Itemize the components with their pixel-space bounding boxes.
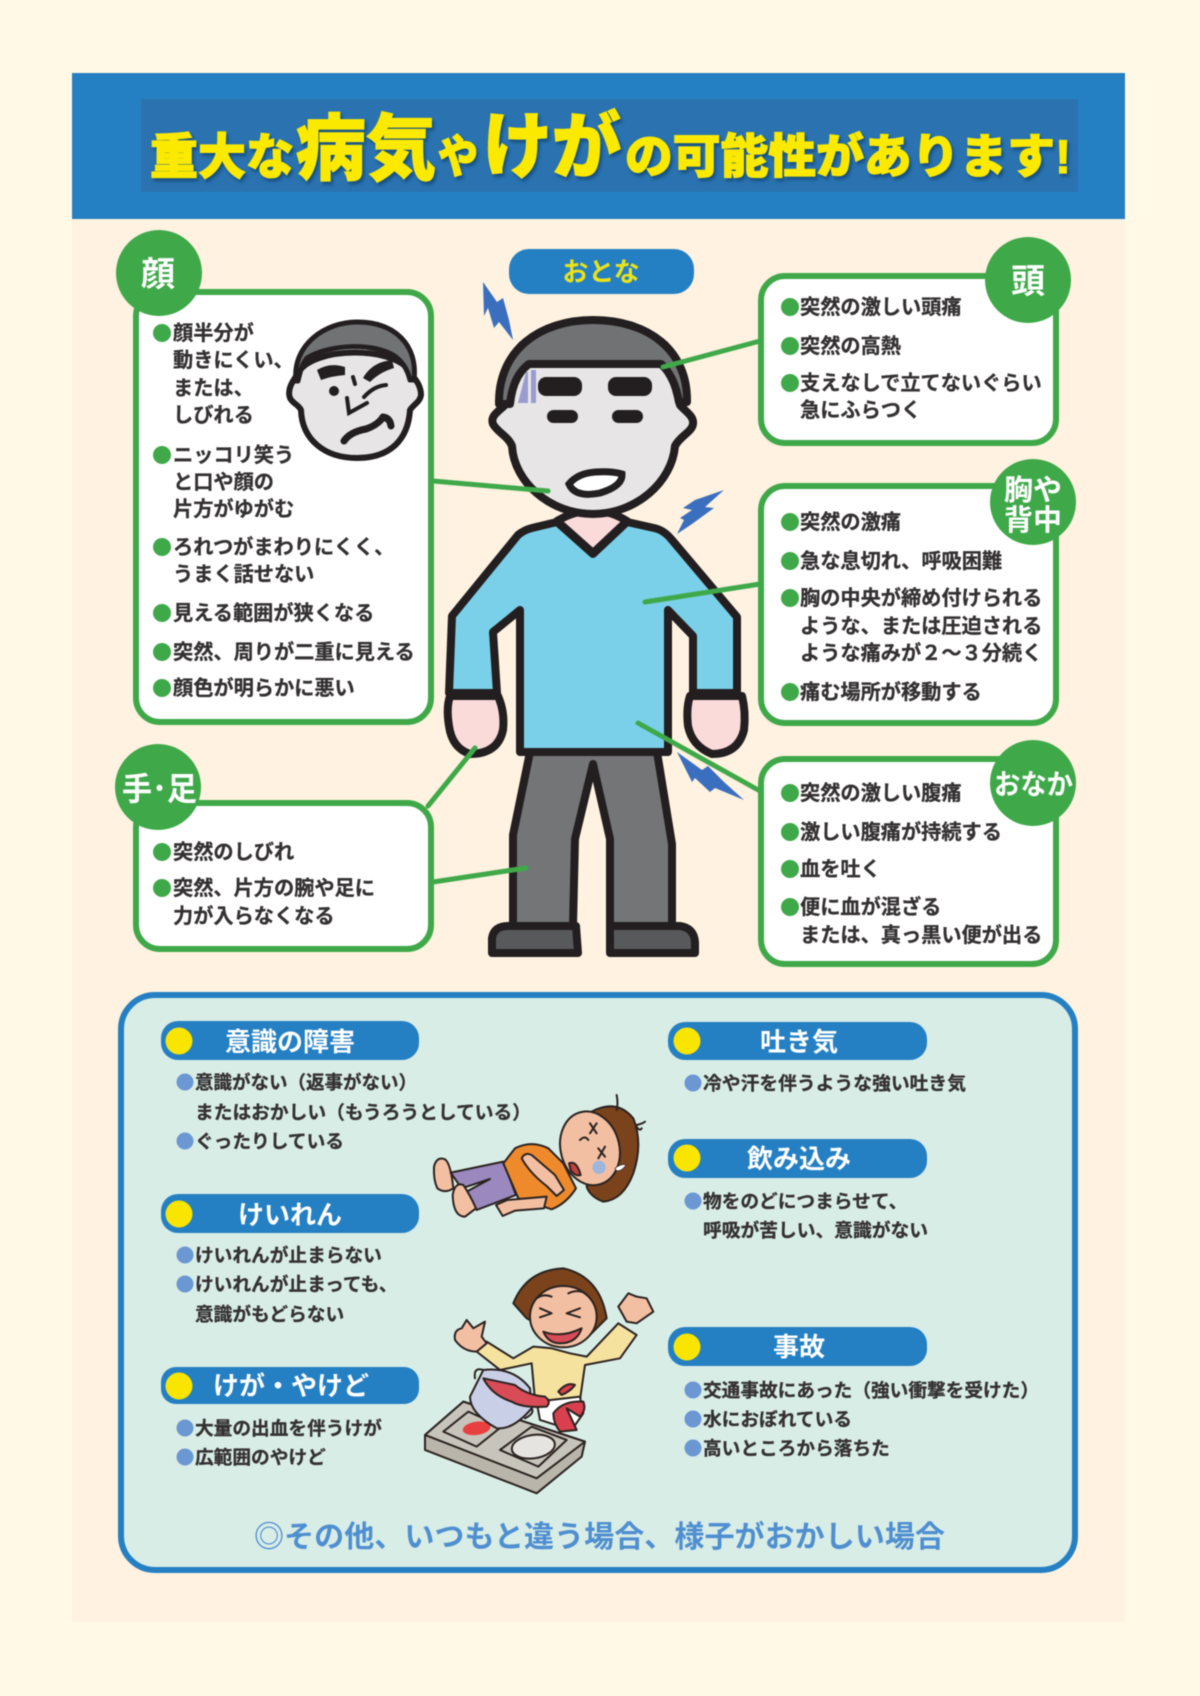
- connector: leg: [433, 868, 526, 882]
- section: consciousness: [161, 1021, 531, 1152]
- section: accidents: 交通事故にあった（強い衝撃を受けた）: [703, 1380, 1039, 1401]
- head: [492, 345, 693, 514]
- list: face symptoms: 片方がゆがむ: [173, 497, 294, 521]
- list: stomach symptoms: または、真っ黒い便が出る: [800, 923, 1042, 947]
- section: consciousness: 意識がない（返事がない）: [195, 1072, 417, 1093]
- list: face symptoms: しびれる: [173, 404, 254, 427]
- list: head symptoms: 急にふらつく: [800, 399, 921, 422]
- list: face symptoms: 顔半分が: [173, 321, 254, 345]
- illustration: collapsed girl: [434, 1095, 645, 1217]
- title text: 病気: [296, 110, 436, 190]
- list: stomach symptoms: 便に血が混ざる: [800, 895, 941, 919]
- trousers: [513, 752, 672, 926]
- heading: face: [116, 230, 202, 316]
- footer note: ◎その他、いつもと違う場合、様子がおかしい場合: [254, 1520, 945, 1554]
- section: accidents: 事故: [773, 1332, 825, 1362]
- list: face symptoms: と口や顔の: [173, 471, 274, 494]
- list: chest symptoms: [781, 510, 1042, 704]
- illustration: adult man: [448, 320, 745, 953]
- section: convulsions: 意識がもどらない: [195, 1304, 344, 1325]
- list: face symptoms: うまく話せない: [173, 563, 314, 586]
- illustration: girl with spilled pot: [425, 1268, 653, 1493]
- mouth: [569, 472, 622, 494]
- left hand: [448, 696, 503, 754]
- connector: hand: [428, 748, 475, 806]
- list: hands and feet symptoms: [153, 840, 375, 928]
- panel: chest and back: [761, 459, 1076, 723]
- section: consciousness: 意識の障害: [225, 1027, 355, 1057]
- list: face symptoms: ろれつがまわりにくく、: [173, 535, 394, 559]
- list: face symptoms: 動きにくい、: [173, 349, 294, 372]
- list: chest symptoms: 急な息切れ、呼吸困難: [800, 549, 1002, 573]
- title text: の可能性があります!: [625, 130, 1071, 183]
- list: stomach symptoms: [781, 781, 1042, 947]
- section: convulsions: けいれんが止まっても、: [195, 1274, 397, 1295]
- icon: lightning bolt belly: [677, 752, 744, 800]
- list: stomach symptoms: 血を吐く: [800, 858, 881, 881]
- section: swallowing: 飲み込み: [747, 1144, 851, 1174]
- heading: hands and feet: [115, 744, 201, 830]
- section: swallowing: [668, 1139, 928, 1241]
- section: injuries and burns: 大量の出血を伴うけが: [195, 1418, 382, 1439]
- list: head symptoms: 突然の激しい頭痛: [800, 295, 962, 319]
- connector: face: [433, 481, 548, 491]
- heading: stomach: おなか: [994, 769, 1073, 800]
- list: chest symptoms: 痛む場所が移動する: [800, 680, 982, 704]
- list: chest symptoms: 胸の中央が締め付けられる: [800, 586, 1042, 610]
- list: hands and feet symptoms: 突然、片方の腕や足に: [173, 876, 375, 900]
- adult label: おとな: [562, 257, 640, 287]
- connector: chest: [645, 584, 760, 602]
- shoes: [492, 926, 695, 953]
- list: head symptoms: 突然の高熱: [800, 334, 901, 358]
- list: head symptoms: 支えなしで立てないぐらい: [800, 372, 1042, 395]
- list: chest symptoms: ような、または圧迫される: [800, 615, 1042, 638]
- section: convulsions: [161, 1194, 419, 1325]
- heading: face: 顔: [141, 256, 175, 294]
- section: accidents: 高いところから落ちた: [703, 1438, 890, 1459]
- list: hands and feet symptoms: 力が入らなくなる: [173, 904, 335, 928]
- section: convulsions: けいれん: [238, 1200, 342, 1230]
- list: stomach symptoms: 突然の激しい腹痛: [800, 781, 962, 805]
- connector: belly: [638, 723, 760, 791]
- section: nausea: 冷や汗を伴うような強い吐き気: [703, 1073, 966, 1094]
- heading: head: 頭: [1011, 263, 1045, 301]
- heading: chest and back: 背中: [1004, 504, 1062, 537]
- heading: chest and back: 胸や: [1004, 474, 1062, 507]
- section: accidents: [668, 1327, 1039, 1459]
- section: swallowing: 呼吸が苦しい、意識がない: [703, 1220, 928, 1241]
- icon: lightning bolt chest: [677, 490, 724, 534]
- section: injuries and burns: [161, 1367, 419, 1468]
- section: swallowing: 物をのどにつまらせて、: [703, 1191, 907, 1212]
- list: hands and feet symptoms: 突然のしびれ: [173, 840, 294, 864]
- sweater: [449, 522, 737, 752]
- heading: stomach: [990, 740, 1076, 826]
- right hand: [687, 696, 745, 754]
- heading: hands and feet: 手･足: [122, 771, 197, 807]
- heading: chest and back: [990, 459, 1076, 545]
- forehead mark: [518, 370, 536, 403]
- section: injuries and burns: 広範囲のやけど: [195, 1447, 326, 1468]
- list: head symptoms: [781, 295, 1042, 422]
- list: stomach symptoms: 激しい腹痛が持続する: [800, 820, 1002, 844]
- section: accidents: 水におぼれている: [703, 1409, 852, 1430]
- connector: head: [663, 341, 760, 367]
- section: consciousness: ぐったりしている: [195, 1131, 344, 1152]
- panel: stomach: [761, 740, 1076, 964]
- panel: emergency conditions: [121, 995, 1075, 1570]
- heading: head: [985, 237, 1071, 323]
- neck: [557, 510, 627, 553]
- section: nausea: [668, 1022, 966, 1094]
- list: face symptoms: ニッコリ笑う: [173, 444, 294, 467]
- panel: hands and feet: [115, 744, 431, 949]
- illustration: drooping face: [289, 322, 421, 458]
- panel: face: [116, 230, 431, 722]
- section: nausea: 吐き気: [760, 1027, 838, 1057]
- eyebrows: [538, 377, 582, 396]
- hair: [499, 320, 687, 404]
- icon: lightning bolt head: [483, 282, 513, 340]
- title text: [150, 108, 1071, 190]
- title text: や: [438, 131, 478, 183]
- list: face symptoms: 見える範囲が狭くなる: [173, 601, 374, 625]
- list: chest symptoms: 突然の激痛: [800, 510, 901, 534]
- title text: けが: [483, 108, 621, 188]
- eyes: [547, 410, 578, 423]
- section: convulsions: けいれんが止まらない: [195, 1245, 382, 1266]
- list: chest symptoms: ような痛みが２～３分続く: [800, 641, 1042, 665]
- section: consciousness: またはおかしい（もうろうとしている）: [195, 1102, 531, 1123]
- section: injuries and burns: けが・やけど: [213, 1371, 369, 1401]
- adult label: [509, 249, 694, 294]
- title banner: [72, 73, 1125, 219]
- list: face symptoms: 突然、周りが二重に見える: [173, 640, 415, 664]
- title text: 重大な: [150, 131, 294, 185]
- panel: head: [761, 237, 1071, 443]
- list: face symptoms: または、: [173, 378, 254, 400]
- list: face symptoms: [153, 321, 415, 700]
- list: face symptoms: 顔色が明らかに悪い: [173, 676, 355, 700]
